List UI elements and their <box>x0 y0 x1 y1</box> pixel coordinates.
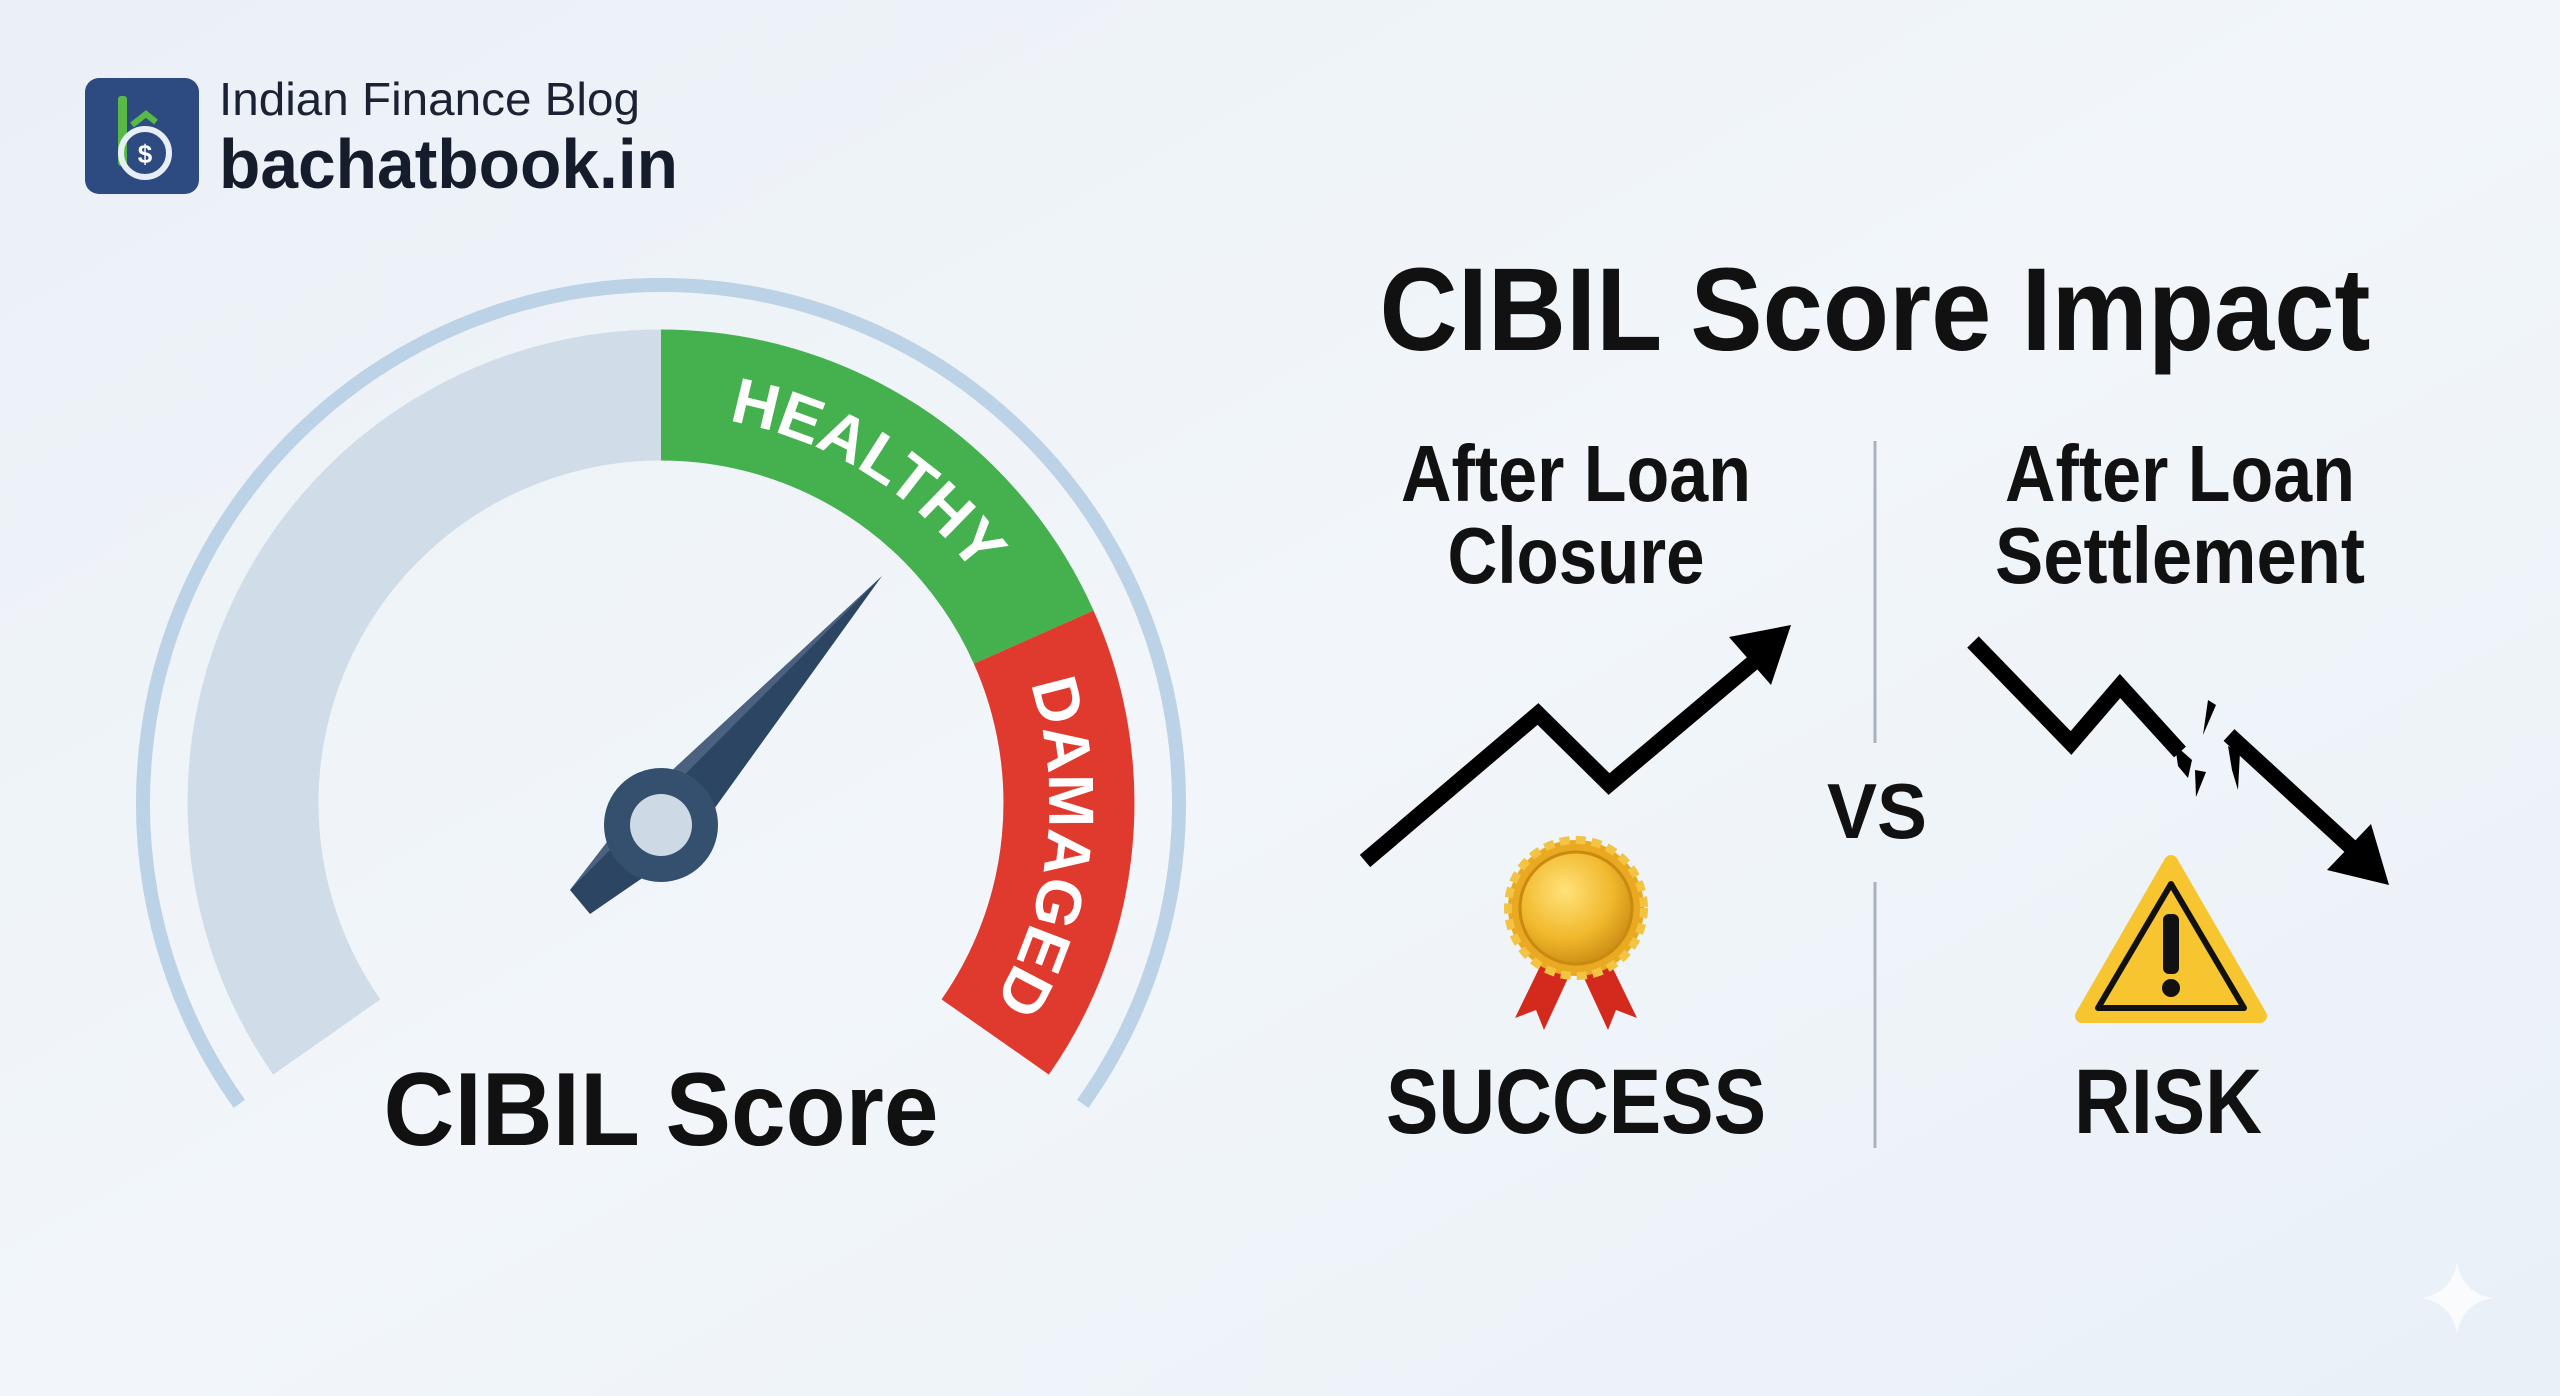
icon: warning <box>2082 862 2260 1016</box>
heading: settlement: After Loan <box>2005 429 2355 518</box>
logo <box>85 73 678 203</box>
main title: CIBIL Score Impact <box>1380 244 2370 376</box>
needle <box>570 576 882 914</box>
vs label: VS <box>1827 767 1927 855</box>
logo: bachatbook.in <box>219 125 678 203</box>
label: healthy: HEALTHY <box>732 378 1009 562</box>
logo icon <box>85 78 199 194</box>
label: success: SUCCESS <box>1386 1051 1766 1153</box>
gauge healthy arc <box>661 395 1034 637</box>
heading: settlement <box>1995 429 2365 600</box>
icon: medal <box>1508 840 1644 1030</box>
gauge damaged arc <box>995 637 1069 1037</box>
logo icon: $ <box>138 139 153 169</box>
heading: closure: After Loan <box>1401 429 1751 518</box>
gauge title: CIBIL Score <box>384 1052 938 1168</box>
gauge outer ring <box>143 285 1179 1104</box>
heading: closure: Closure <box>1448 511 1704 600</box>
sparkle <box>2421 1262 2493 1334</box>
arrow: up trend <box>1365 625 1791 861</box>
gauge <box>136 278 1186 1108</box>
divider <box>1874 441 1876 1148</box>
label: risk: RISK <box>2074 1051 2262 1153</box>
gauge gray arc <box>253 395 661 1037</box>
heading: settlement: Settlement <box>1995 511 2365 600</box>
heading: closure <box>1401 429 1751 600</box>
arrow: down trend broken <box>1973 642 2389 885</box>
label: damaged: DAMAGED <box>1002 676 1094 1014</box>
logo text: Indian Finance Blog <box>219 73 640 125</box>
